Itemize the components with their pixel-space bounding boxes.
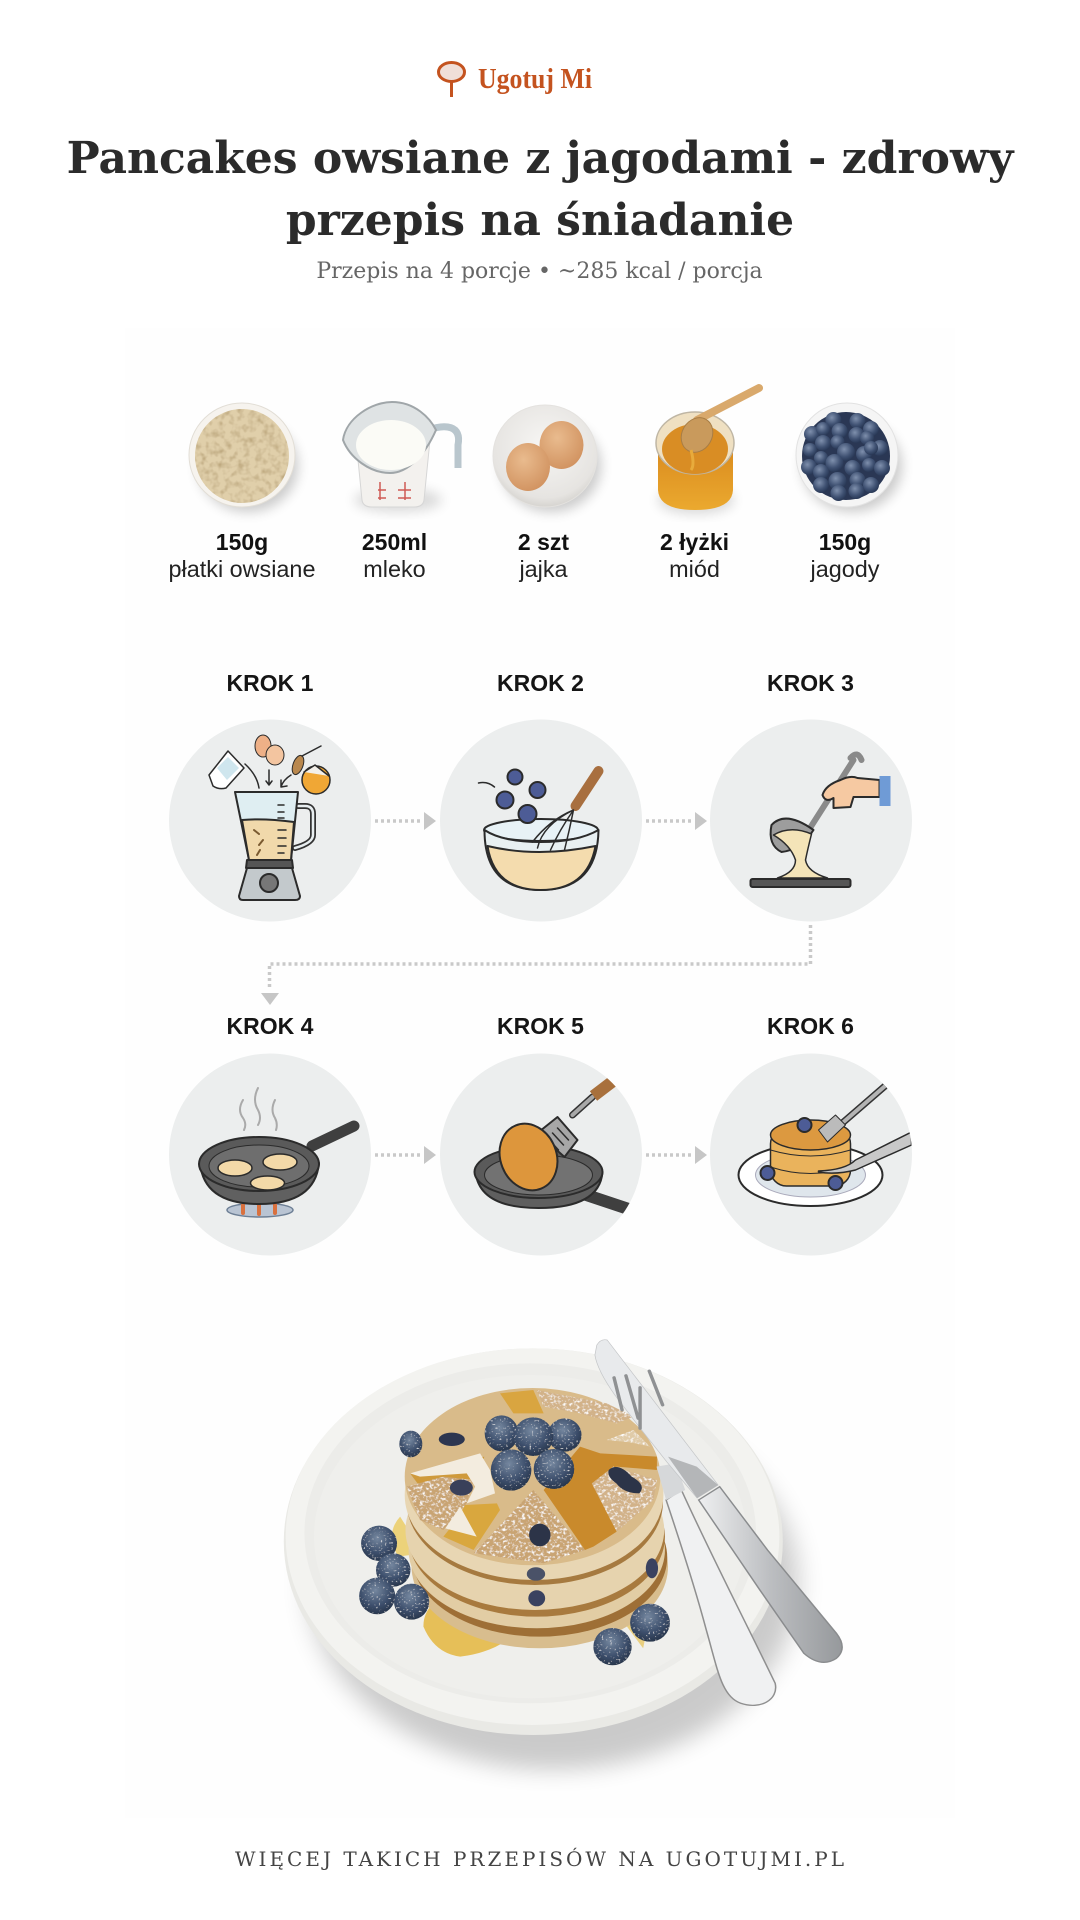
ingredient: milk jug [343, 402, 459, 512]
step 5: flipping pancake [440, 1013, 642, 1256]
step 5: flipping pancake: KROK 5 [497, 1013, 584, 1039]
step 6: stack on plate [710, 1013, 912, 1256]
ingredient labels: płatki owsiane [169, 556, 315, 582]
step 3: ladle pouring [710, 670, 912, 922]
ingredient labels: 150g [819, 529, 871, 555]
step 3: ladle pouring: KROK 3 [767, 670, 854, 696]
honey on top [410, 1390, 657, 1550]
pancake stack [405, 1410, 668, 1648]
honey puddles [392, 1517, 649, 1657]
icon: spoon [438, 62, 464, 97]
icon: flip [474, 1080, 638, 1212]
blueberries on plate [359, 1415, 670, 1665]
ingredient: eggs [493, 405, 601, 512]
sugar dusted patches [407, 1390, 657, 1563]
icon: blender [209, 735, 330, 900]
logo wordmark: Ugotuj Mi [478, 64, 592, 95]
step 2: bowl and whisk: KROK 2 [497, 670, 584, 696]
step 2: bowl and whisk [440, 670, 642, 922]
footer: WIĘCEJ TAKICH PRZEPISÓW NA UGOTUJMI.PL [235, 1846, 847, 1871]
step 4: pan on burner: KROK 4 [227, 1013, 314, 1039]
pancake top [405, 1388, 660, 1565]
plate [284, 1348, 783, 1735]
step 1: blender: KROK 1 [227, 670, 314, 696]
icon: ladle and griddle [750, 754, 890, 887]
step 1: blender [169, 670, 371, 922]
arrow: step 3 to 4 connector [261, 925, 810, 1005]
arrow: step 5 to 6 [646, 1146, 707, 1164]
ingredient labels: jagody [810, 556, 880, 582]
arrow: step 1 to 2 [375, 812, 436, 830]
ingredient labels: miód [669, 556, 720, 582]
title: przepis na śniadanie [286, 195, 794, 246]
background panel [125, 328, 955, 1818]
ingredient labels: 250ml [362, 529, 427, 555]
step 6: stack on plate: KROK 6 [767, 1013, 854, 1039]
icon: bowl [478, 770, 598, 890]
ingredient labels: 150g [216, 529, 268, 555]
ingredient labels [169, 529, 880, 582]
subtitle: Przepis na 4 porcje • ~285 kcal / porcja [316, 259, 763, 284]
plate shadow [308, 1397, 798, 1770]
ingredient labels: jajka [518, 556, 569, 582]
ingredient labels: mleko [363, 556, 426, 582]
title: Pancakes owsiane z jagodami - zdrowy [67, 133, 1015, 184]
icon: pancake stack [738, 1083, 912, 1206]
ingredient: honey [656, 388, 759, 514]
ingredient: blueberries [796, 403, 902, 512]
ingredient labels: 2 szt [518, 529, 569, 555]
arrow: step 4 to 5 [375, 1146, 436, 1164]
icon: pan [199, 1088, 354, 1217]
plated pancakes photo [284, 1340, 842, 1770]
step 4: pan on burner [169, 1013, 371, 1256]
ingredient labels: 2 łyżki [660, 529, 729, 555]
arrow: step 2 to 3 [646, 812, 707, 830]
knife [595, 1340, 842, 1662]
fork tines [614, 1376, 640, 1428]
ingredient: oats [189, 403, 298, 512]
glaze and baked-in berries [410, 1433, 658, 1606]
logo: Ugotuj Mi [438, 62, 592, 97]
panel: ingredients [169, 388, 902, 582]
fork [649, 1371, 776, 1705]
